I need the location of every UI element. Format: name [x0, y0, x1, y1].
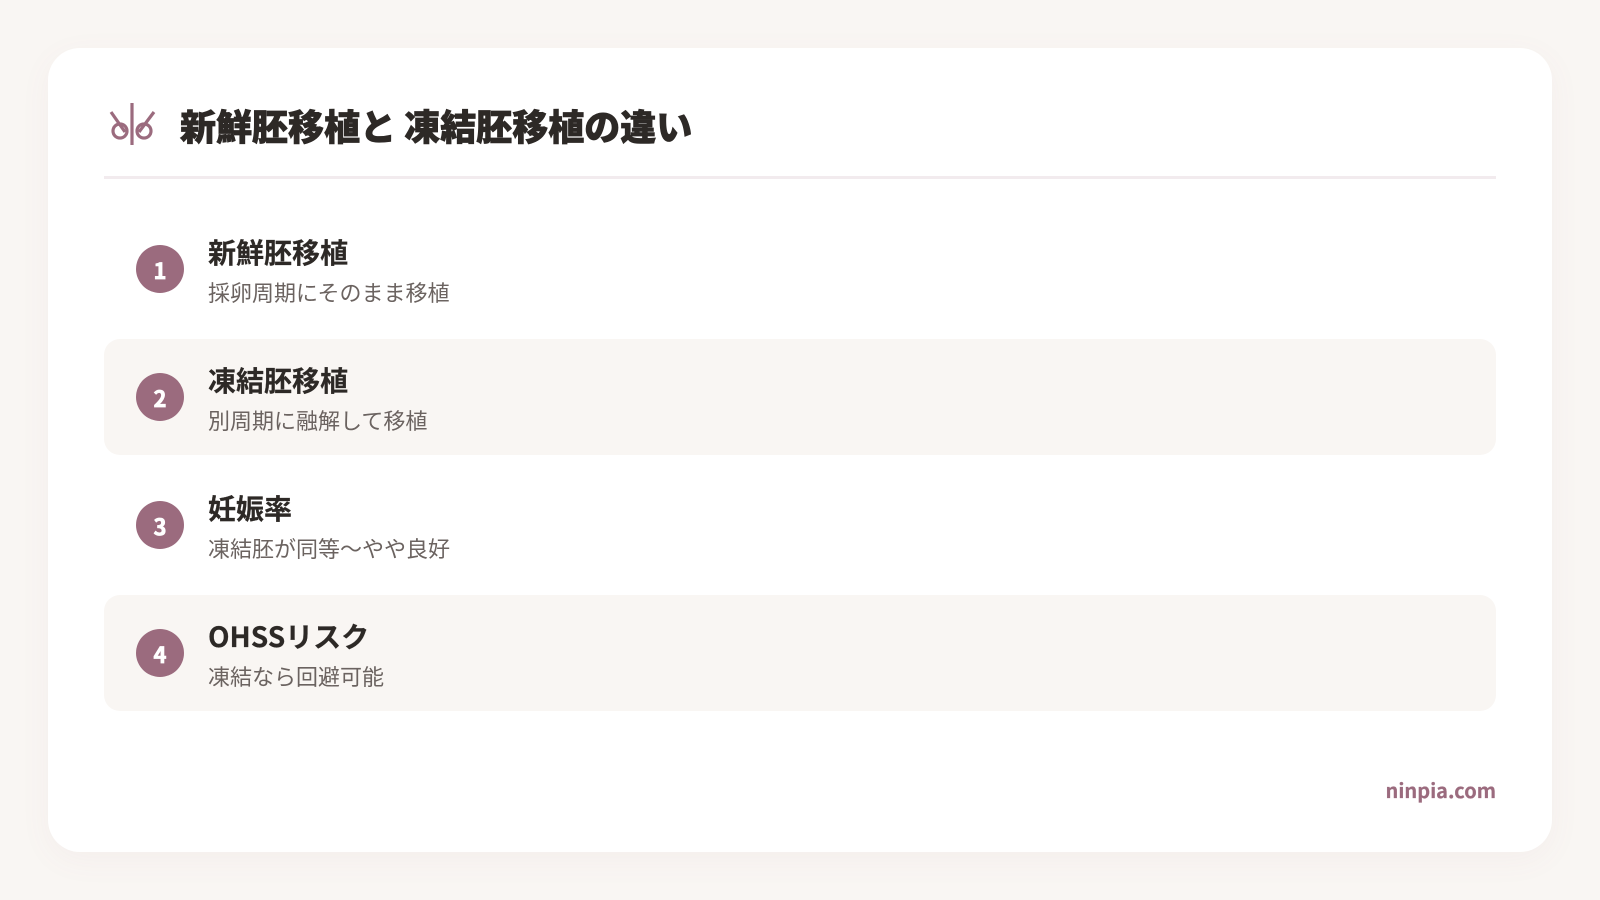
row 2 text: 別周期に融解して移植 [208, 404, 427, 436]
row 4 [104, 595, 1496, 711]
row 3 heading: 妊娠率 [208, 488, 292, 528]
number 2: 2 [154, 382, 166, 414]
row 2 [104, 339, 1496, 455]
row 3 text: 凍結胚が同等〜やや良好 [208, 532, 450, 564]
row 1 heading: 新鮮胚移植 [208, 232, 348, 272]
number 2 [136, 373, 184, 421]
number 1: 1 [154, 254, 166, 286]
row 3 [136, 488, 450, 564]
row 1 text: 採卵周期にそのまま移植 [208, 276, 450, 308]
number 3 [136, 501, 184, 549]
row 4 heading: OHSSリスク [208, 616, 369, 656]
title: 新鮮胚移植と 凍結胚移植の違い [180, 99, 692, 151]
number 4: 4 [154, 638, 166, 670]
number 3: 3 [154, 510, 166, 542]
number 1 [136, 245, 184, 293]
row 1 [136, 232, 450, 308]
row 4 text: 凍結なら回避可能 [208, 660, 384, 692]
icon: embryo transfer [110, 103, 156, 145]
number 4 [136, 629, 184, 677]
footer: site name: ninpia.com [1386, 775, 1496, 804]
row 2 heading: 凍結胚移植 [208, 360, 348, 400]
